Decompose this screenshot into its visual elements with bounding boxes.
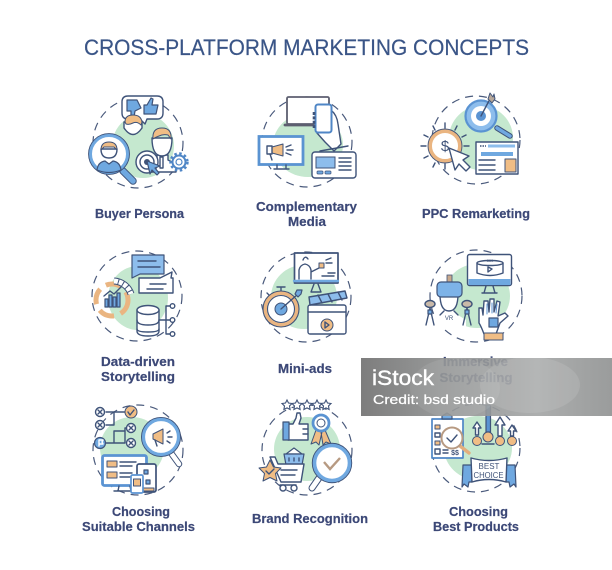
icon: best choice ribbon: CHOICE	[474, 471, 504, 480]
label: complementary media	[256, 200, 357, 229]
icon: gear	[170, 154, 188, 170]
icon: speech bubble with thumbs	[122, 96, 163, 124]
icon: laptop	[285, 97, 332, 125]
label: data-driven storytelling: Data-driven	[101, 355, 175, 369]
icon: database	[137, 306, 159, 336]
label: mini-ads: Mini-ads	[278, 362, 332, 376]
icon: rating stars	[282, 400, 331, 410]
icon: clipboard with magnifier: $$	[451, 450, 459, 457]
icon: best choice ribbon	[462, 458, 516, 487]
title: CROSS-PLATFORM MARKETING CONCEPTS	[84, 35, 529, 60]
panel: choosing best products	[432, 404, 520, 492]
label: choosing best products: Best Products	[433, 520, 519, 534]
icon: tablet and phone	[131, 464, 156, 493]
icon: VR glove	[479, 299, 508, 340]
icon: magnifier with check	[312, 446, 350, 488]
label: immersive storytelling: Storytelling	[440, 371, 512, 385]
icon: VR controllers	[425, 300, 472, 325]
icon: cursor	[449, 148, 470, 171]
panel: immersive storytelling	[425, 250, 522, 342]
panel: mini-ads	[261, 252, 351, 342]
icon: browser window	[476, 142, 518, 174]
icon: stopwatch target	[263, 287, 302, 327]
icon: shopping basket and cart	[270, 448, 304, 491]
label: immersive storytelling	[440, 355, 512, 385]
icon: orange star	[259, 460, 281, 481]
icon: arrow and coins	[472, 405, 516, 446]
label: complementary media: Complementary	[256, 200, 357, 214]
icon: radio	[312, 146, 356, 178]
icon: white speech bubble	[139, 272, 173, 293]
icon: dollar coin with rays: $	[441, 138, 450, 155]
icon: VR headset person: VR	[445, 316, 454, 322]
panel: brand recognition	[259, 400, 352, 495]
icon: thumbs up	[283, 413, 308, 440]
label: data-driven storytelling	[101, 355, 175, 384]
panel: choosing suitable channels	[93, 405, 183, 495]
icon: target and cursor	[136, 151, 160, 175]
label: data-driven storytelling: Storytelling	[101, 370, 175, 384]
watermark banner	[361, 357, 612, 418]
panel: complementary media	[259, 97, 356, 187]
label: ppc remarketing: PPC Remarketing	[422, 207, 530, 221]
icon: persona with target	[150, 128, 176, 172]
label: complementary media: Media	[288, 215, 327, 229]
panel: data-driven storytelling	[92, 251, 182, 341]
icon: presenter monitor	[294, 253, 338, 292]
icon: monitor with megaphone	[259, 136, 303, 169]
icon: blue speech bubble	[132, 255, 164, 278]
icon: magnifier with megaphone	[144, 420, 179, 464]
panel: ppc remarketing	[421, 93, 520, 184]
label: choosing suitable channels: Suitable Channels	[82, 520, 195, 534]
watermark brand: iStock	[372, 367, 435, 390]
icon: decision tree	[94, 406, 137, 448]
icon: 360 video monitor: 360	[487, 258, 494, 263]
watermark credit: Credit: bsd studio	[373, 393, 495, 407]
icon: medal	[311, 415, 331, 445]
icon: phone in hand	[314, 104, 341, 151]
icon: best choice ribbon: BEST	[479, 462, 500, 471]
label: immersive storytelling: Immersive	[443, 355, 508, 369]
icon: clapperboard	[308, 291, 347, 334]
icon: target magnifier	[466, 93, 510, 136]
icon: persona head	[124, 115, 142, 134]
label: choosing suitable channels	[82, 505, 195, 534]
icon: desktop monitor	[102, 456, 146, 491]
label: brand recognition: Brand Recognition	[252, 512, 368, 526]
label: choosing suitable channels: Choosing	[112, 505, 170, 519]
label: buyer persona: Buyer Persona	[95, 207, 185, 221]
icon: magnifier with person	[90, 136, 133, 181]
icon: connectors	[159, 304, 175, 336]
icon: donut chart	[96, 281, 131, 316]
label: choosing best products	[433, 505, 519, 534]
panel: buyer persona	[90, 96, 188, 188]
label: choosing best products: Choosing	[449, 505, 508, 519]
